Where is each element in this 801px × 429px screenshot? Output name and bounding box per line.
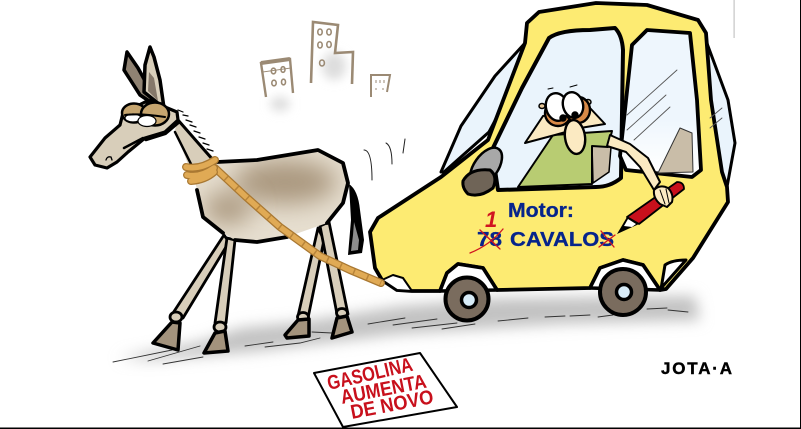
tail (348, 184, 364, 255)
steering wheel (463, 142, 508, 195)
car body (370, 3, 728, 291)
rear wheel (600, 269, 646, 315)
cavalos label: CAVALOS (510, 229, 614, 251)
car windshield (441, 42, 526, 172)
wheel arch rear (590, 260, 660, 290)
body (190, 150, 348, 242)
donkey (90, 47, 364, 353)
handwritten number: 1 (485, 207, 497, 232)
car lettering (470, 200, 615, 253)
motor label: Motor: (508, 200, 574, 222)
neck and mane (175, 110, 218, 185)
near hind leg (320, 222, 352, 338)
background buildings (261, 22, 390, 111)
ground shadow (118, 296, 700, 360)
car rear side window (620, 30, 701, 177)
driver shirt (518, 131, 612, 187)
rope knot (186, 160, 215, 181)
driver (518, 85, 660, 190)
driver arm (607, 135, 660, 190)
sign text line 2: AUMENTA (339, 371, 428, 409)
right ear (144, 47, 164, 108)
front bumper light (382, 275, 412, 291)
left ear (124, 52, 152, 103)
driver face (525, 108, 605, 143)
head (90, 102, 178, 168)
car door window (492, 28, 623, 190)
building middle (311, 22, 353, 84)
sign text line 3: DE NOVO (349, 386, 435, 424)
rear bumper (661, 260, 686, 289)
building right (371, 75, 390, 97)
near front leg (204, 238, 235, 353)
pencil and hand (617, 182, 684, 234)
front wheel (446, 278, 488, 320)
crossed out number: 78 (477, 229, 502, 251)
driver nose (563, 119, 587, 155)
signature: JOTA·A (661, 359, 732, 378)
building left (261, 59, 293, 97)
sign text line 1: GASOLINA (325, 354, 415, 395)
car (370, 3, 735, 320)
donkey eyes (122, 102, 169, 126)
far front leg (153, 235, 229, 350)
wheel arch front (440, 264, 497, 291)
driver seat (592, 145, 611, 183)
car back window (705, 38, 735, 187)
eyebrows (548, 85, 577, 89)
rear seat (658, 128, 693, 173)
window reflections (627, 70, 722, 140)
ground sign (314, 353, 457, 427)
ground lines (113, 308, 688, 364)
glasses (543, 90, 590, 126)
far hind leg (285, 228, 324, 338)
rope (186, 160, 381, 283)
motion lines (364, 139, 405, 180)
red strikes (470, 229, 615, 253)
ears (539, 100, 591, 108)
